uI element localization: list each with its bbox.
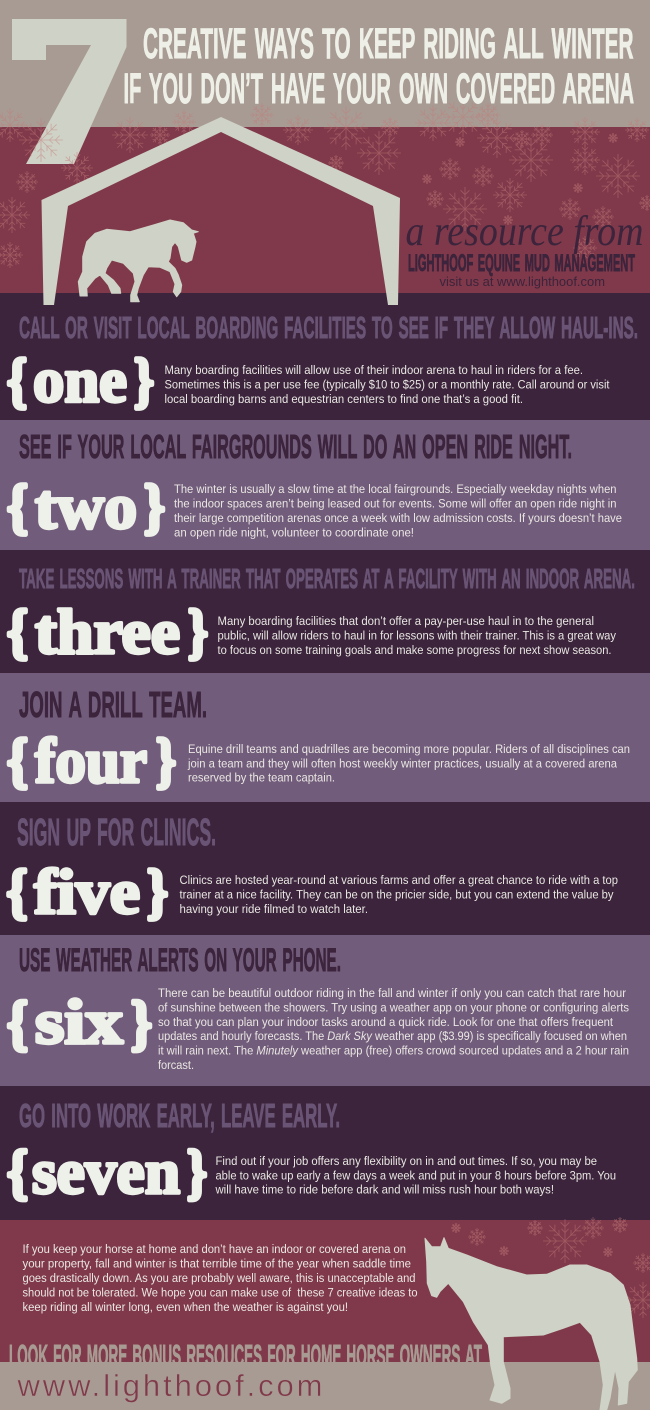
- text one: local boarding barns and equestrian centers to find one that’s a good fit.: [164, 392, 523, 406]
- text six: forcast.: [158, 1058, 194, 1072]
- number six: {: [7, 990, 28, 1056]
- text three: Many boarding facilities that don’t offer a pay-per-use haul in to the general: [218, 614, 594, 628]
- number one: [7, 346, 154, 416]
- footer taupe band: [0, 1362, 650, 1410]
- number three: [7, 597, 208, 667]
- text seven: able to wake up early a few days a week and put in your 8 hours before 3pm. You: [216, 1168, 616, 1182]
- closing paragraph: If you keep your horse at home and don’t have an indoor or covered arena on: [22, 1242, 406, 1256]
- text five: [180, 873, 618, 916]
- text five: Clinics are hosted year-round at various farms and offer a great chance to ride with a top: [180, 873, 618, 887]
- panel: two: [0, 420, 650, 550]
- number three: three: [35, 597, 180, 667]
- heading seven: GO INTO WORK EARLY, LEAVE EARLY.: [19, 1097, 340, 1134]
- number one: {: [7, 348, 27, 414]
- text one: Sometimes this is a per use fee (typically $10 to $25) or a monthly rate. Call around or visit: [164, 378, 610, 392]
- panel: three: [0, 550, 650, 673]
- footer rose band: [0, 1220, 650, 1362]
- number six: }: [131, 990, 152, 1056]
- number three: {: [7, 598, 28, 664]
- panel three background: [0, 550, 650, 673]
- panel six background: [0, 935, 650, 1086]
- text two: their large competition arenas once a week with low admission costs. If yours doesn’t have: [174, 511, 622, 525]
- panel: footer: [0, 1217, 650, 1410]
- text six: it will rain next. The Minutely weather app (free) offers crowd sourced updates and a 2 hour rain: [158, 1044, 629, 1058]
- resource credit: visit us at www.lighthoof.com: [440, 275, 605, 289]
- closing paragraph: should not be tolerated. We hope you can make use of these 7 creative ideas to: [22, 1285, 418, 1299]
- text four: [187, 742, 630, 785]
- text four: reserved by the team captain.: [188, 771, 335, 785]
- title: [124, 20, 634, 113]
- number two: two: [35, 472, 137, 542]
- panel: one: [0, 293, 650, 420]
- number four: {: [7, 728, 28, 794]
- number two: {: [7, 474, 28, 540]
- panel seven background: [0, 1086, 650, 1220]
- closing paragraph: keep riding all winter long, even when the weather is against you!: [22, 1300, 348, 1314]
- text two: the indoor spaces aren’t being leased out for events. Some will offer an open ride night in: [174, 496, 616, 510]
- text three: [218, 614, 617, 657]
- text one: [164, 363, 610, 406]
- number five: five: [34, 857, 140, 927]
- number seven: }: [187, 1139, 207, 1205]
- text seven: Find out if your job offers any flexibility on in and out times. If so, you may be: [216, 1154, 597, 1168]
- text six: so that you can plan your indoor tasks around a quick ride. Look for one that offers frequent: [158, 1015, 614, 1029]
- number four: [7, 726, 176, 796]
- text six: There can be beautiful outdoor riding in the fall and winter if only you can catch that rare hour: [158, 986, 626, 1000]
- number four: four: [35, 726, 147, 796]
- text six: [158, 986, 629, 1072]
- panel: header: [0, 0, 650, 293]
- number seven: {: [7, 1139, 28, 1205]
- text two: [174, 482, 622, 540]
- panel five background: [0, 802, 650, 935]
- panel: four: [0, 673, 650, 802]
- text three: public, will allow riders to haul in for lessons with their trainer. This is a great way: [218, 628, 617, 642]
- panel: five: [0, 802, 650, 935]
- number six: six: [35, 987, 124, 1057]
- text seven: will have time to ride before dark and will miss rush hour both ways!: [215, 1183, 554, 1197]
- panel one background: [0, 293, 650, 420]
- number five: [6, 857, 168, 927]
- number five: {: [6, 858, 28, 924]
- panel four background: [0, 673, 650, 802]
- number six: [7, 987, 152, 1057]
- closing paragraph: goes drastically down. As you are probably well aware, this is unacceptable and: [22, 1271, 416, 1285]
- text one: Many boarding facilities will allow use of their indoor arena to haul in riders for a fee.: [164, 363, 583, 377]
- number four: }: [156, 728, 176, 794]
- panel: five: SIGN UP FOR CLINICS.: [17, 812, 216, 854]
- heading four: JOIN A DRILL TEAM.: [19, 684, 207, 725]
- closing paragraph: your property, fall and winter is that terrible time of the year when saddle time: [22, 1256, 411, 1270]
- closing paragraph: [22, 1242, 418, 1314]
- panel: seven: [0, 1086, 650, 1220]
- text five: having your ride filmed to watch later.: [180, 902, 368, 916]
- panel two background: [0, 420, 650, 550]
- text three: to focus on some training goals and make some progress for next show season.: [218, 643, 612, 657]
- number two: [7, 472, 165, 542]
- website url: www.lighthoof.com: [16, 1368, 322, 1403]
- number three: }: [188, 598, 208, 664]
- icon: walking horse: [78, 220, 198, 302]
- text four: join a team and they will often host weekly winter practices, usually at a covered arena: [187, 756, 617, 770]
- icon: standing horse: [425, 1238, 637, 1410]
- number five: }: [147, 858, 168, 924]
- text five: trainer at a nice facility. They can be on the pricier side, but you can extend the value by: [180, 888, 614, 902]
- header rose band: [0, 127, 650, 293]
- numeral 7 shape: [12, 19, 126, 164]
- number one: one: [33, 346, 127, 416]
- number one: }: [134, 348, 154, 414]
- text two: The winter is usually a slow time at the local fairgrounds. Especially weekday nights when: [174, 482, 616, 496]
- header taupe band: [0, 0, 650, 127]
- number seven: seven: [32, 1137, 180, 1207]
- text two: an open ride night, volunteer to coordinate one!: [174, 526, 414, 540]
- barn outline: [42, 117, 400, 305]
- text six: updates and hourly forecasts. The Dark Sky weather app ($3.99) is specifically focused on when: [158, 1029, 627, 1043]
- number two: }: [144, 474, 165, 540]
- resource credit: [406, 209, 644, 289]
- panel: six: [0, 935, 650, 1086]
- text seven: [215, 1154, 616, 1197]
